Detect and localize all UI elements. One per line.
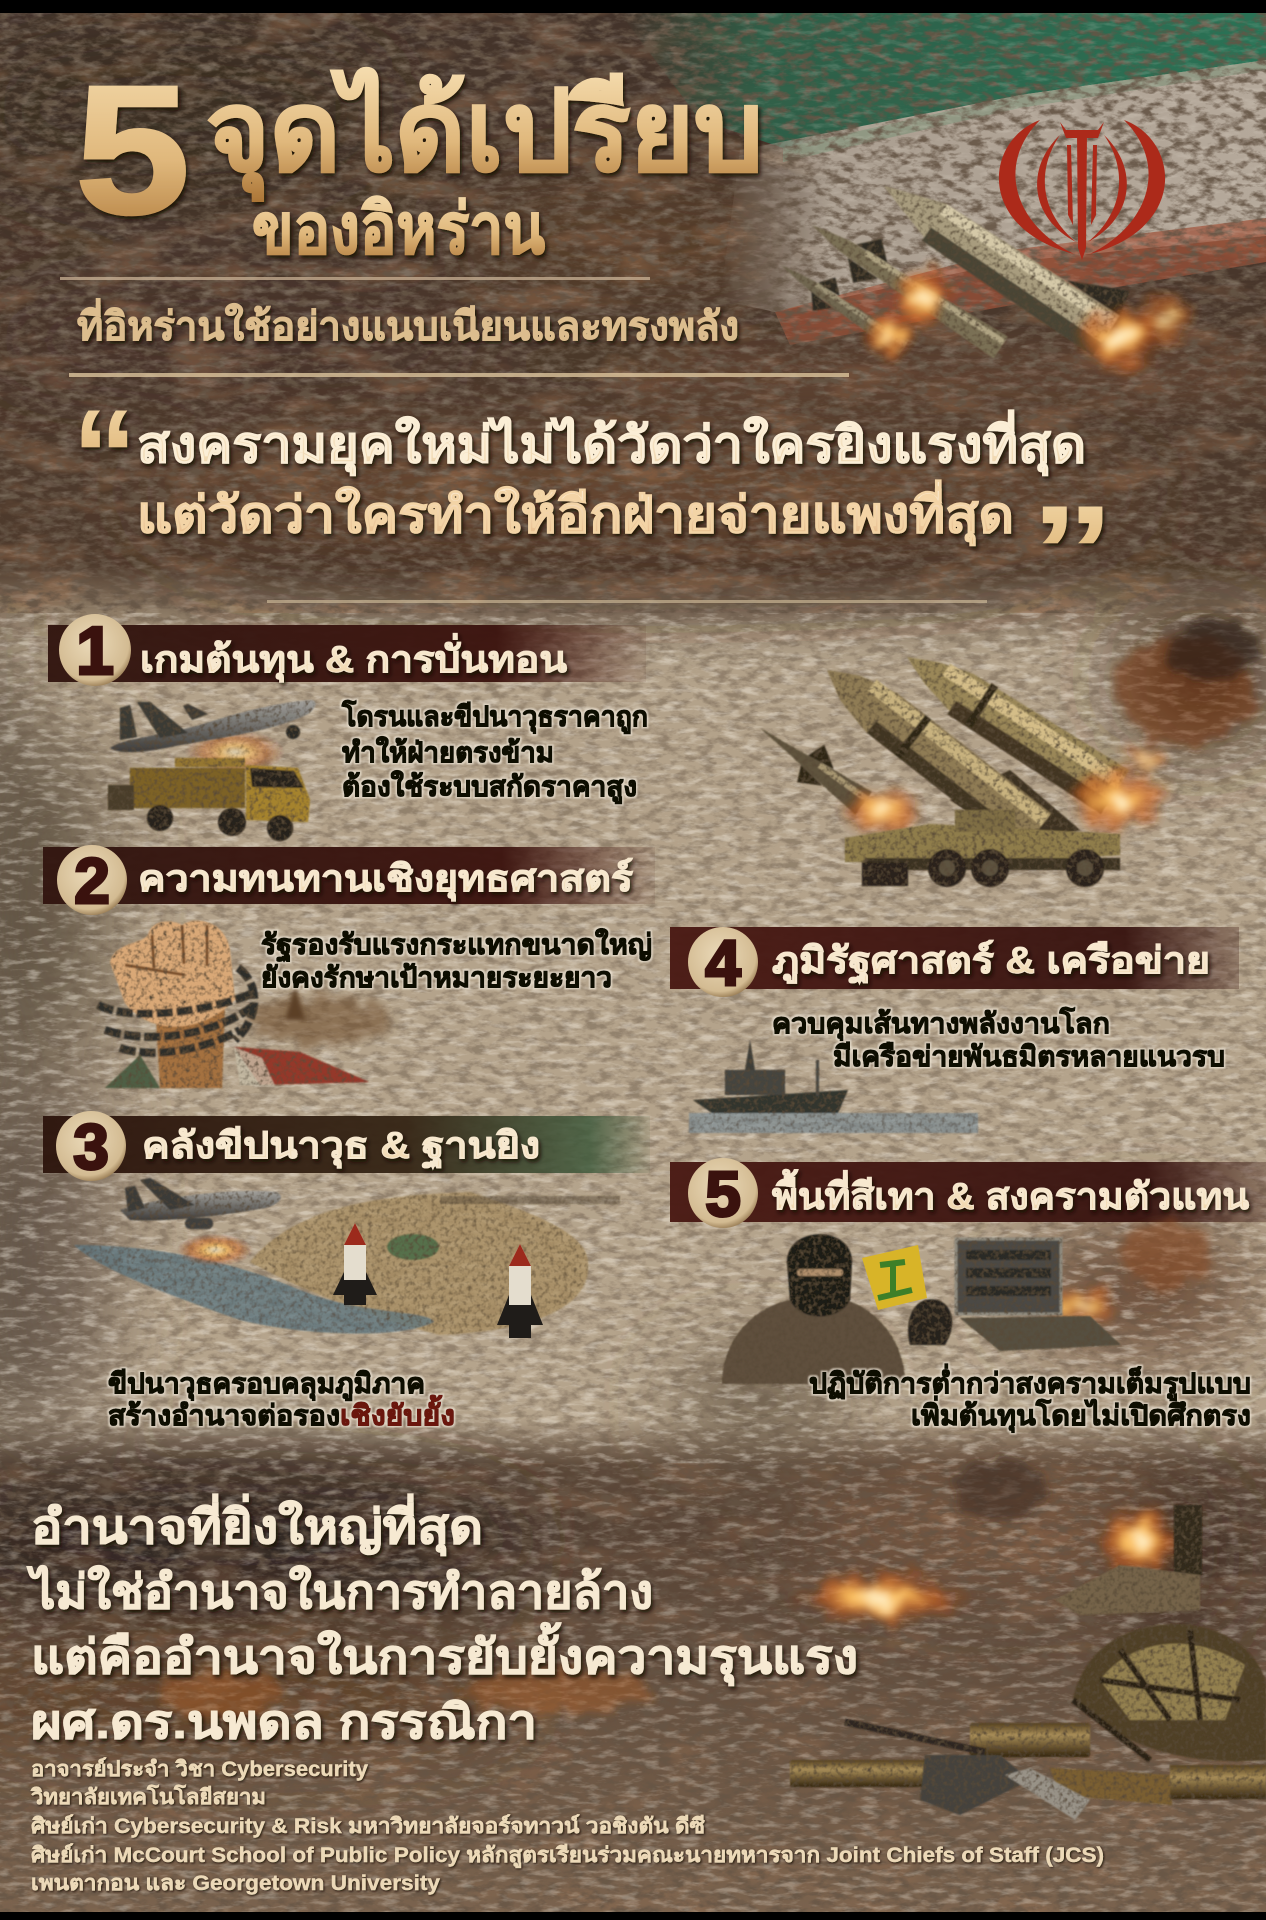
illustration: missile launcher truck	[747, 620, 1260, 887]
body text 1: โดรนและขีปนาวุธราคาถูก	[341, 699, 648, 734]
illustration: missile marker	[497, 1244, 543, 1338]
heading 4: ภูมิรัฐศาสตร์ & เครือข่าย	[772, 940, 1210, 984]
closing statement: แต่คืออำนาจในการยับยั้งความรุนแรง	[31, 1622, 858, 1686]
title: จุดได้เปรียบ	[206, 68, 763, 202]
illustration: rifle and tags	[845, 1722, 1090, 1820]
badge 4	[688, 927, 758, 999]
title	[75, 47, 763, 268]
banner 1	[48, 625, 646, 682]
illustration: top missiles	[770, 145, 1195, 372]
illustration: laptop	[908, 1223, 1215, 1351]
title: 5	[75, 47, 190, 252]
body text 1: ต้องใช้ระบบสกัดราคาสูง	[342, 770, 637, 804]
author credentials	[30, 1757, 1104, 1895]
badge 2: 2	[74, 845, 110, 917]
badge 3	[56, 1111, 126, 1183]
banner 2	[43, 847, 655, 904]
illustration: bottom battlefield	[160, 1460, 1266, 1820]
body text 1: ทำให้ฝ่ายตรงข้าม	[342, 736, 554, 768]
illustration: plane	[120, 1178, 281, 1229]
body text 2: ยังคงรักษาเป้าหมายระยะยาว	[261, 962, 612, 993]
illustration: shell casings	[790, 1723, 1266, 1805]
heading 5: พื้นที่สีเทา & สงครามตัวแทน	[772, 1169, 1249, 1217]
heading 1: เกมต้นทุน & การบั่นทอน	[140, 633, 567, 683]
body text 4: ควบคุมเส้นทางพลังงานโลก	[772, 1006, 1110, 1041]
closing statement: ไม่ใช่อำนาจในการทำลายล้าง	[26, 1564, 653, 1618]
author credentials: ศิษย์เก่า Cybersecurity & Risk มหาวิทยาลัยจอร์จทาวน์ วอชิงตัน ดีซี	[31, 1814, 705, 1838]
closing statement	[26, 1493, 858, 1748]
flag: Iran	[620, 13, 1266, 405]
author credentials: ศิษย์เก่า McCourt School of Public Policy หลักสูตรเรียนร่วมคณะนายทหารจาก Joint Chiefs of Staff (JCS)	[31, 1843, 1104, 1869]
illustration: map	[74, 1192, 620, 1335]
body text 5: เพิ่มต้นทุนโดยไม่เปิดศึกตรง	[911, 1395, 1251, 1433]
quote: “	[72, 382, 137, 528]
heading 2: ความทนทานเชิงยุทธศาสตร์	[138, 858, 633, 902]
illustration: masked soldier	[722, 1234, 905, 1384]
author credentials: วิทยาลัยเทคโนโลยีสยาม	[30, 1784, 266, 1809]
title: ของอิหร่าน	[252, 190, 545, 268]
illustration: yellow flag	[862, 1245, 927, 1310]
illustration: drone	[110, 700, 315, 752]
badge 1: 1	[76, 613, 114, 689]
body text 3: ขีปนาวุธครอบคลุมภูมิภาค	[108, 1368, 425, 1401]
quote: แต่วัดว่าใครทำให้อีกฝ่ายจ่ายแพงที่สุด	[137, 480, 1014, 546]
author credentials: อาจารย์ประจำ วิชา Cybersecurity	[31, 1757, 368, 1781]
section 1	[48, 613, 648, 841]
body text 5	[809, 1363, 1251, 1433]
badge 4: 4	[705, 927, 741, 999]
section 4	[670, 927, 1239, 1133]
illustration: chained fist	[98, 921, 390, 1088]
section 5	[670, 1158, 1266, 1433]
quote	[72, 382, 1115, 624]
body text 3	[108, 1368, 455, 1431]
icon: Iran emblem	[999, 120, 1165, 260]
banner 3	[43, 1116, 650, 1173]
banner 5	[670, 1162, 1266, 1222]
badge 2	[57, 845, 127, 917]
section 2	[43, 845, 655, 1088]
heading 3: คลังขีปนาวุธ & ฐานยิง	[142, 1125, 540, 1169]
body text 3: เชิงยับยั้ง	[340, 1394, 455, 1431]
badge 3: 3	[73, 1111, 109, 1183]
body text 3: สร้างอำนาจต่อรอง	[108, 1400, 340, 1431]
body text 2: รัฐรองรับแรงกระแทกขนาดใหญ่	[261, 928, 652, 963]
body text 4: มีเครือข่ายพันธมิตรหลายแนวรบ	[833, 1041, 1225, 1072]
body text 5: ปฏิบัติการต่ำกว่าสงครามเต็มรูปแบบ	[809, 1363, 1251, 1401]
author credentials: เพนตากอน และ Georgetown University	[31, 1872, 440, 1895]
body text 4	[772, 1006, 1225, 1072]
illustration: ship	[689, 1040, 978, 1133]
banner 4	[670, 927, 1239, 989]
closing statement: ผศ.ดร.นพดล กรรณิกา	[31, 1695, 537, 1748]
quote: ”	[1030, 478, 1115, 624]
closing statement: อำนาจที่ยิ่งใหญ่ที่สุด	[31, 1493, 483, 1556]
body text 2	[261, 928, 652, 993]
illustration: helmet	[1073, 1624, 1266, 1761]
subtitle: ที่อิหร่านใช้อย่างแนบเนียนและทรงพลัง	[77, 298, 739, 349]
body text 1	[341, 699, 648, 804]
badge 5: 5	[705, 1158, 741, 1230]
badge 1	[59, 613, 131, 689]
section 3	[43, 1111, 650, 1431]
illustration: missile marker	[333, 1223, 377, 1305]
badge 5	[688, 1158, 758, 1230]
quote: สงครามยุคใหม่ไม่ได้วัดว่าใครยิงแรงที่สุด	[137, 410, 1086, 476]
illustration: truck	[108, 730, 310, 841]
